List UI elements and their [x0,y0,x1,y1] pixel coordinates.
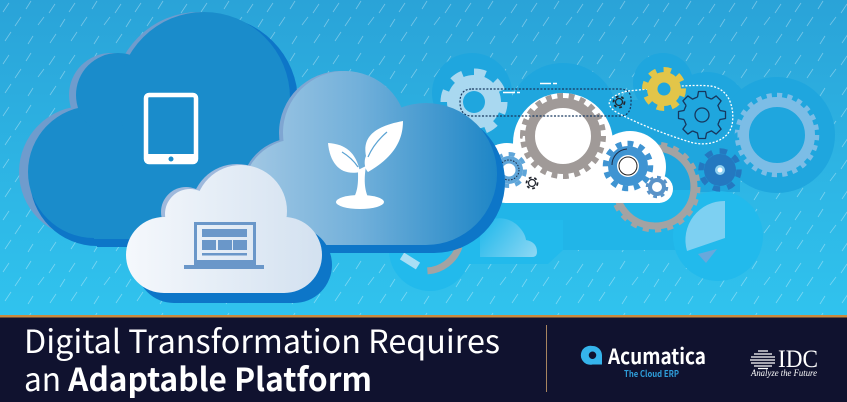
white gear cloud [477,93,673,203]
dotted belt white [458,85,733,153]
title second line: an Adaptable Platform [24,355,372,401]
pie chart [685,201,725,263]
gear: small blue left [493,154,525,186]
gear: blue center [606,144,650,188]
white dashes [503,84,557,92]
icon: IDC globe [750,351,775,368]
gear: light top left [444,72,504,132]
gear: large gray [523,96,603,176]
gear: dark blue [701,151,739,189]
icon: laptop [184,222,264,269]
dotted belt dark [460,89,631,116]
Acumatica logo [581,341,706,380]
gear: yellow [645,70,683,108]
cloud: plant [241,71,505,253]
IDC logo [750,346,818,378]
small pale cloud [480,218,537,257]
IDC tagline: Analyze the Future [750,368,817,378]
cloud: tablet [19,12,298,247]
divider [546,325,547,392]
gear: light large right [738,96,816,174]
footer band [0,315,847,402]
gear: star top [614,96,624,108]
title: Digital Transformation Requires [24,317,500,363]
gear: small blue right [648,178,666,196]
gears cloud backdrop [389,53,835,291]
gray gear ring lower left [389,199,461,271]
gear: small star lower [526,178,538,188]
Acumatica wordmark: Acumatica [607,341,706,371]
Acumatica tagline: The Cloud ERP [624,367,679,380]
icon: sprout [328,121,403,209]
gear: gray behind cloud [612,144,698,230]
IDC wordmark: IDC [778,346,818,373]
background [0,0,847,316]
gear: dark outline [678,92,726,138]
cloud: laptop [126,164,332,303]
icon: Acumatica mark [581,346,602,365]
icon: tablet [146,95,196,163]
